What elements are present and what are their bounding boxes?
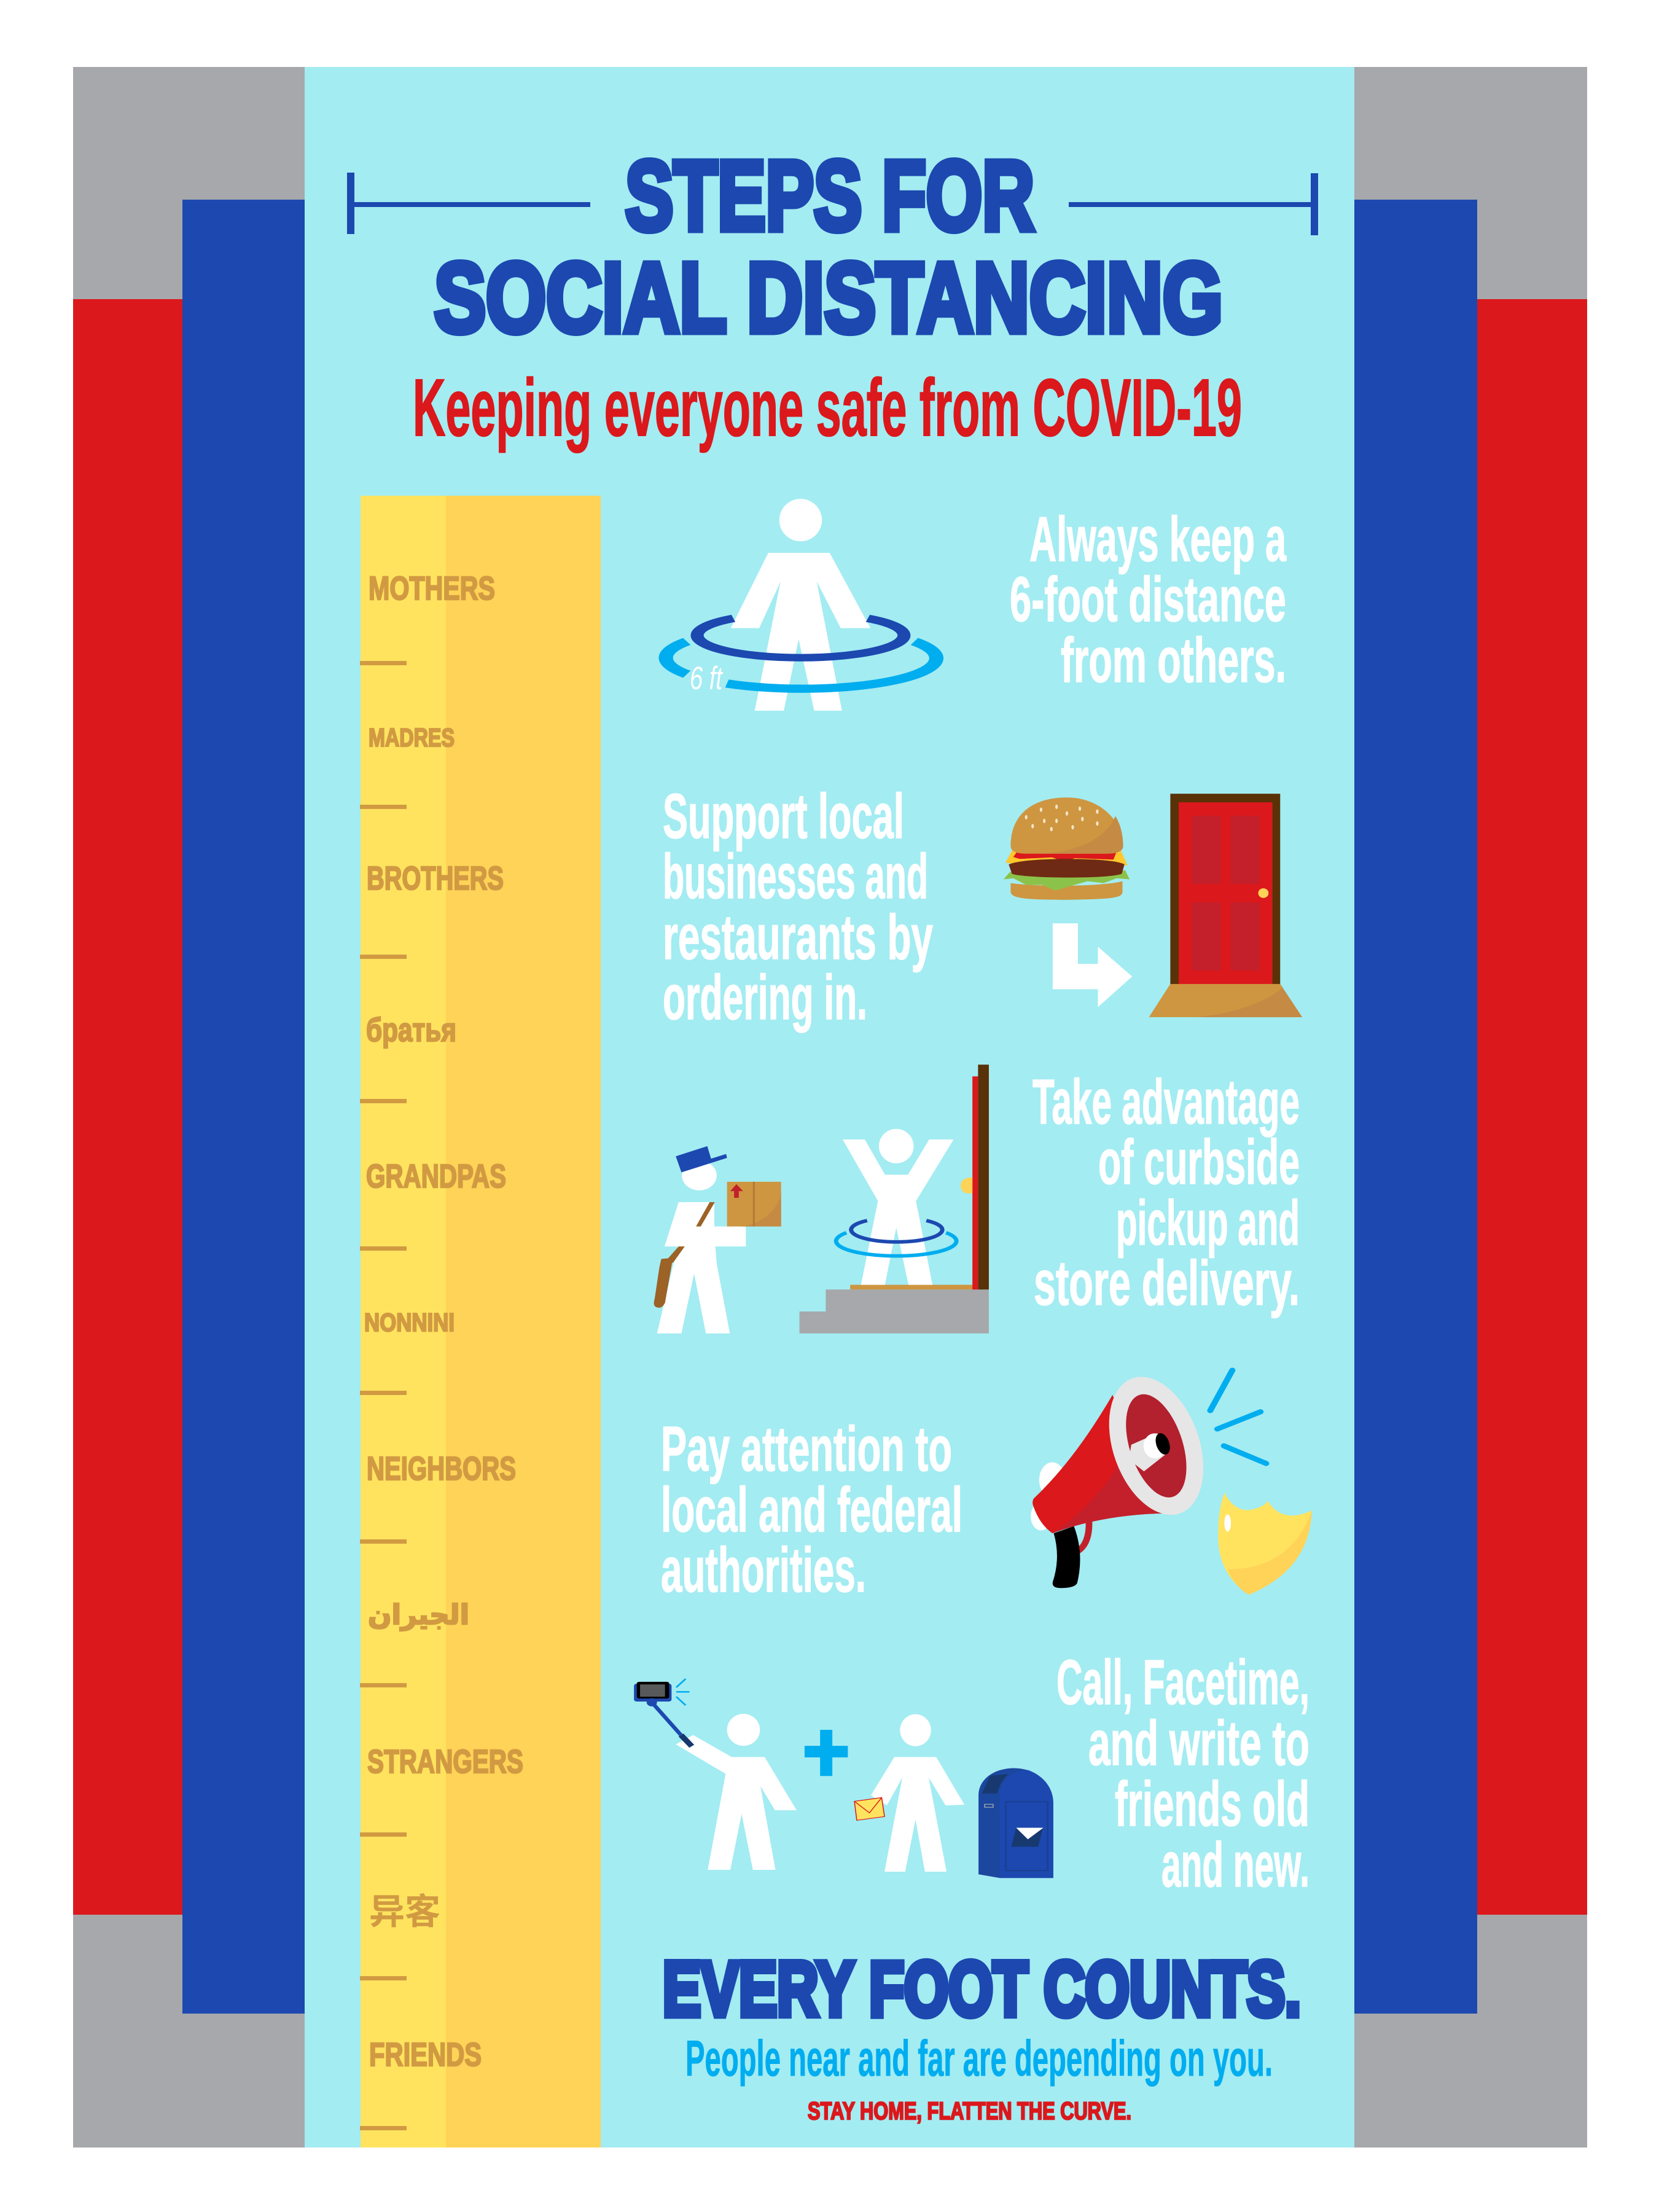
text: keep distance: Always keep a	[1029, 504, 1286, 574]
text: curbside: of curbside	[1098, 1127, 1300, 1197]
background: blue band	[182, 200, 1477, 2014]
ruler labels: GRANDPAS	[366, 1158, 506, 1195]
icon: door	[1149, 794, 1302, 1017]
text: support local	[663, 781, 933, 1033]
ruler labels: NONNINI	[364, 1308, 455, 1337]
text: support local: businesses and	[663, 841, 928, 912]
title bracket left	[347, 173, 590, 234]
title: SOCIAL DISTANCING	[434, 243, 1223, 353]
icon: sound lines	[1210, 1370, 1266, 1463]
icon: person with selfie stick	[634, 1679, 797, 1870]
icon: shield	[1218, 1493, 1312, 1595]
text: keep distance	[1010, 504, 1286, 695]
ruler labels: STRANGERS	[367, 1743, 523, 1780]
text: call and write: and write to	[1088, 1708, 1310, 1778]
icon: mailbox	[978, 1768, 1053, 1878]
icon: person at door with rings	[800, 1065, 989, 1334]
center panel	[305, 67, 1354, 2148]
text: curbside	[1032, 1066, 1300, 1318]
text: support local: Support local	[663, 781, 904, 851]
text: keep distance: from others.	[1061, 625, 1286, 695]
background: red band	[73, 299, 1587, 1915]
text: curbside: store delivery.	[1034, 1248, 1300, 1318]
text: call and write: and new.	[1161, 1829, 1310, 1900]
ruler labels: 异客	[369, 1892, 440, 1932]
text: call and write: friends old	[1115, 1768, 1310, 1839]
ruler labels: MADRES	[369, 723, 455, 752]
ruler labels	[364, 570, 523, 2073]
ruler labels: братья	[366, 1012, 456, 1049]
arrow: to door	[1053, 923, 1132, 1007]
text: support local: restaurants by	[663, 902, 933, 972]
icon: figure with 6 ft rings	[666, 499, 936, 711]
icon: delivery person with box	[654, 1146, 781, 1334]
ruler labels: NEIGHBORS	[367, 1450, 516, 1487]
ruler labels: MOTHERS	[369, 570, 495, 607]
icon: megaphone	[1031, 1369, 1219, 1588]
text: authorities	[661, 1413, 962, 1605]
6 ft label: 6 ft	[690, 660, 724, 697]
closing call to action: STAY HOME, FLATTEN THE CURVE.	[808, 2098, 1131, 2125]
text: curbside: Take advantage	[1032, 1066, 1300, 1137]
text: support local: ordering in.	[663, 962, 867, 1033]
ruler labels: الجيران	[368, 1598, 469, 1631]
text: authorities: Pay attention to	[661, 1413, 952, 1484]
text: keep distance: 6-foot distance	[1010, 564, 1286, 635]
title	[434, 141, 1223, 353]
ruler labels: BROTHERS	[367, 860, 504, 897]
title bracket right	[1069, 173, 1318, 235]
text: call and write: Call, Facetime,	[1056, 1647, 1310, 1718]
closing headline: EVERY FOOT COUNTS.	[663, 1947, 1301, 2032]
text: authorities: authorities.	[661, 1534, 866, 1605]
icon: burger	[1004, 797, 1130, 900]
text: call and write	[1056, 1647, 1310, 1900]
ruler	[360, 496, 601, 2148]
text: curbside: pickup and	[1116, 1187, 1300, 1258]
ruler labels: FRIENDS	[369, 2036, 482, 2073]
text: authorities: local and federal	[661, 1474, 962, 1545]
icon: plus	[805, 1730, 848, 1776]
icon: person with envelope	[854, 1714, 964, 1872]
title: STEPS FOR	[625, 141, 1034, 251]
